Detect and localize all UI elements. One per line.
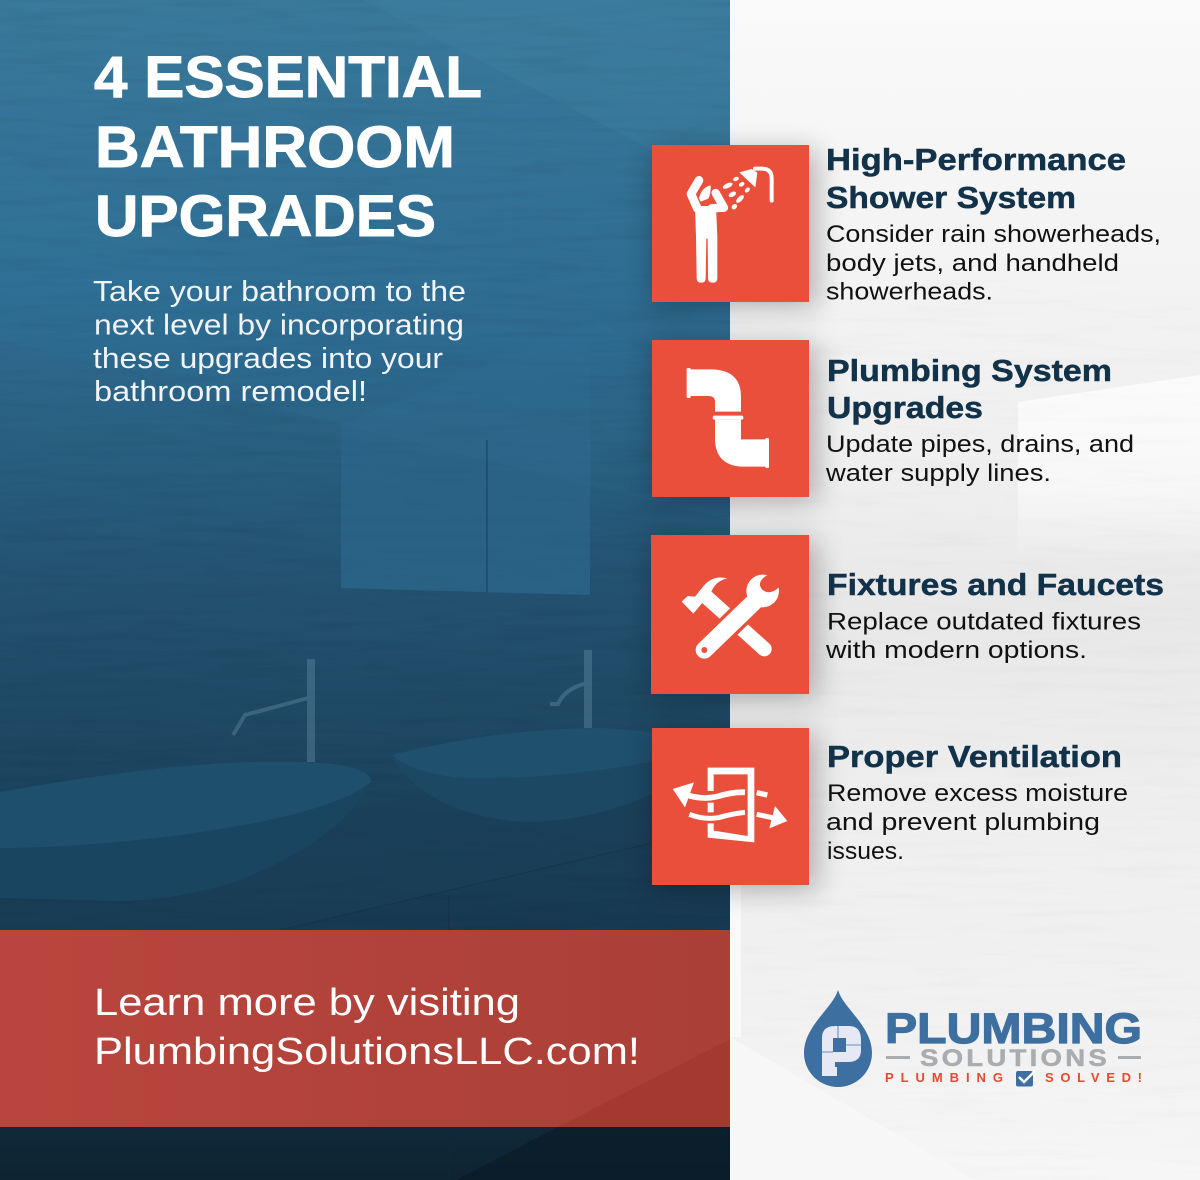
shower description: showerheads.: [826, 278, 993, 306]
logo subtitle: SOLUTIONS: [920, 1046, 1110, 1072]
intro text: next level by incorporating: [94, 310, 464, 342]
card: plumbing: [652, 340, 809, 497]
panel: right background: [730, 0, 1200, 1180]
card: shower: [652, 145, 809, 302]
title: UPGRADES: [95, 184, 436, 249]
plumbing heading: [827, 353, 1112, 425]
shower heading: Shower System: [826, 180, 1076, 215]
fixtures description: with modern options.: [825, 637, 1087, 664]
plumbing heading: Plumbing System: [827, 353, 1112, 388]
call to action text: PlumbingSolutionsLLC.com!: [94, 1031, 640, 1073]
card shadows: [651, 150, 817, 890]
plumbing description: water supply lines.: [825, 460, 1051, 487]
intro text: bathroom remodel!: [94, 376, 367, 408]
title: [94, 45, 482, 249]
logo: Plumbing Solutions: [804, 990, 1142, 1087]
call to action text: Learn more by visiting: [94, 982, 520, 1024]
icon: check box: [1016, 1071, 1035, 1086]
logo wordmark: PLUMBING: [885, 1005, 1142, 1053]
shower text: [826, 142, 1161, 306]
ventilation description: [826, 780, 1128, 865]
card: fixtures: [651, 535, 809, 694]
shower description: [826, 221, 1161, 306]
logo tagline: SOLVED!: [1045, 1070, 1142, 1085]
ventilation description: issues.: [827, 838, 904, 865]
ventilation text: [826, 739, 1128, 865]
photo: marble wall: [0, 0, 730, 930]
intro text: Take your bathroom to the: [93, 276, 466, 308]
photo: cabinet lines and dark floor: [279, 843, 730, 1180]
photo: mirror: [341, 322, 590, 595]
plumbing text: [825, 353, 1134, 487]
logo tagline: [885, 1070, 1142, 1085]
shower description: Consider rain showerheads,: [826, 221, 1161, 248]
icon: hammer and wrench: [682, 568, 785, 653]
fixtures text: [825, 567, 1164, 664]
icon: pipes: [687, 368, 769, 468]
ventilation description: and prevent plumbing: [826, 809, 1100, 836]
photo: ceiling plane: [363, 0, 730, 190]
card: ventilation: [652, 728, 809, 885]
plumbing description: [825, 431, 1134, 487]
shower description: body jets, and handheld: [826, 250, 1119, 277]
fixtures heading: Fixtures and Faucets: [827, 567, 1164, 602]
photo: left sink: [0, 762, 371, 901]
plumbing description: Update pipes, drains, and: [826, 431, 1134, 458]
photo: right faucet: [550, 650, 588, 728]
intro text: [93, 276, 466, 408]
photo: vanity counter: [0, 735, 730, 930]
panel: call to action band: [0, 930, 730, 1127]
title: 4 ESSENTIAL: [94, 45, 482, 110]
title: BATHROOM: [95, 115, 455, 180]
call to action text: [94, 982, 640, 1073]
ventilation heading: Proper Ventilation: [827, 739, 1122, 774]
fixtures description: Replace outdated fixtures: [827, 608, 1141, 636]
panel: left bathroom photo background: [0, 0, 730, 1180]
icon: person under shower: [691, 169, 772, 283]
icon: water drop with pipe P: [804, 990, 872, 1087]
photo: upper wall band: [0, 150, 730, 520]
logo tagline: PLUMBING: [885, 1070, 1003, 1085]
intro text: these upgrades into your: [93, 343, 443, 375]
icon: air flow through window: [673, 768, 787, 842]
photo: left faucet: [233, 659, 312, 762]
shower heading: High-Performance: [826, 142, 1126, 177]
photo: right sink: [392, 728, 660, 822]
ventilation description: Remove excess moisture: [827, 780, 1128, 807]
plumbing heading: Upgrades: [827, 390, 983, 425]
shower heading: [826, 142, 1126, 215]
fixtures description: [825, 608, 1141, 664]
